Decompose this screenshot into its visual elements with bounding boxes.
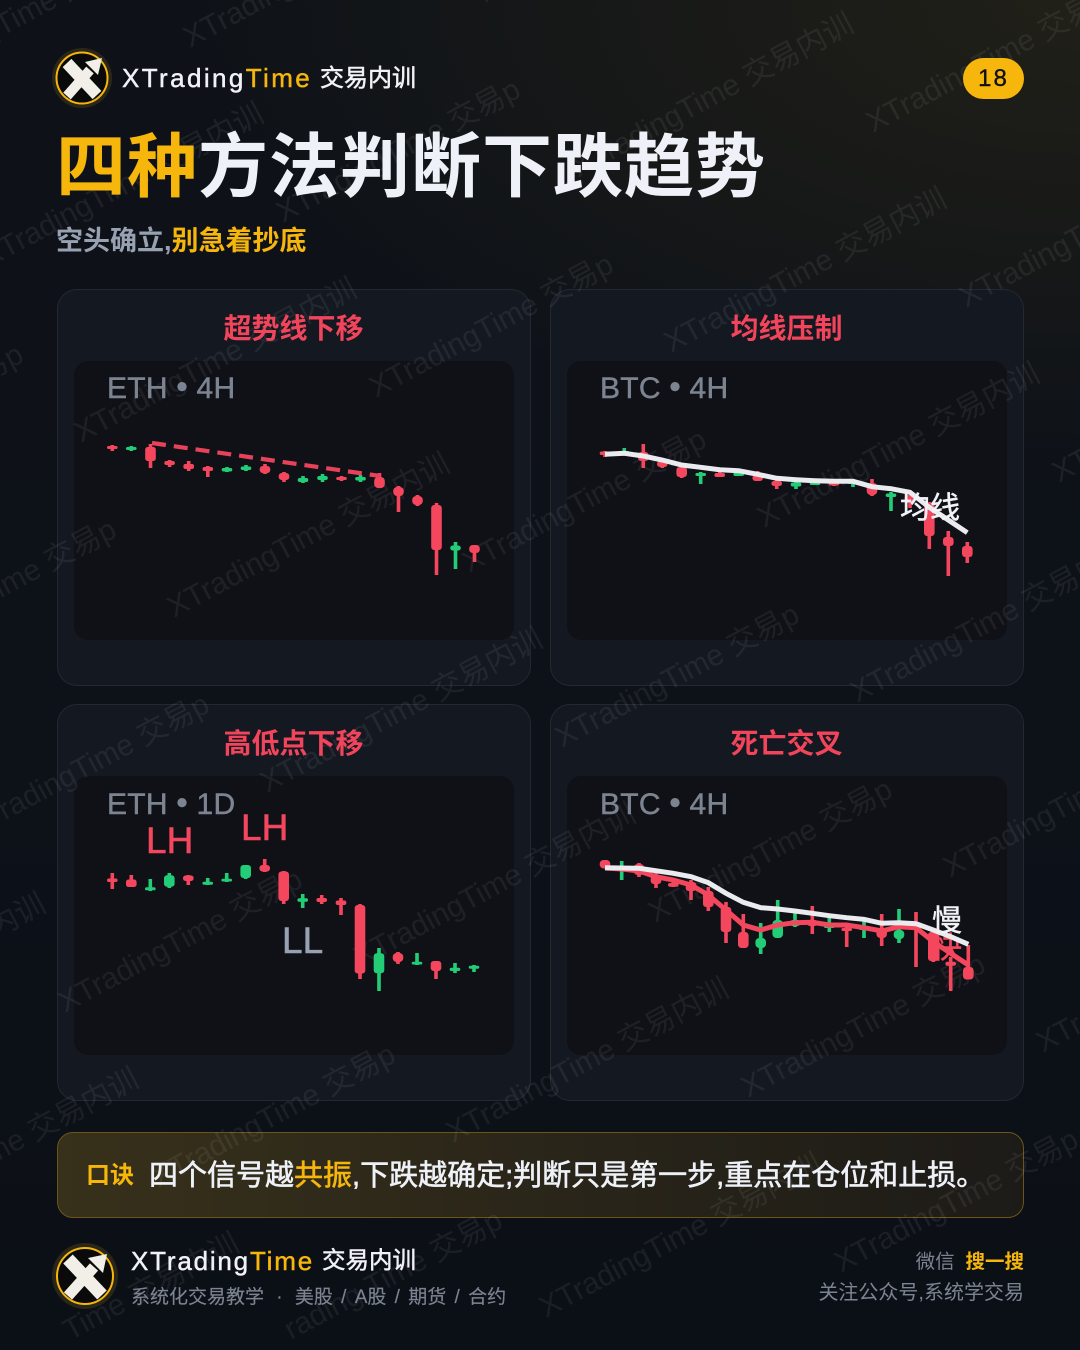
page number badge: [963, 58, 1024, 99]
callout background: [56, 1132, 1024, 1218]
watermark pattern: XTradingTime 交易内训: [162, 447, 455, 624]
card heading: trendline: 超势线下移: [223, 313, 364, 344]
panel: death cross card background: [550, 704, 1024, 1100]
candles red: [600, 860, 974, 991]
candles green: [619, 448, 896, 511]
moving average line: [605, 453, 967, 533]
chart label: ETH 1D: ETH · 1D: [107, 775, 235, 827]
candles red: [107, 859, 441, 979]
page number badge: 18: [978, 65, 1009, 92]
candlestick chart: lower highs and lows: [107, 807, 480, 991]
watermark pattern: XTradingTime 交易p: [550, 598, 805, 754]
panel: moving average card background: [550, 288, 1024, 686]
chart label: BTC 4H: BTC · 4H: [600, 359, 728, 411]
candlestick chart: trendline falling: [107, 440, 480, 575]
watermark pattern: rading Time 交易p: [279, 1204, 508, 1346]
watermark pattern: XTradingTime 交易p: [146, 1038, 401, 1194]
footer brand name: [131, 1246, 416, 1276]
label: LH second: LH: [241, 807, 288, 848]
watermark pattern: XTradingTime 交易内训: [566, 7, 859, 184]
watermark pattern: XTradingTime 交易p: [53, 863, 308, 1019]
subtitle: 空头确立,别急着抄底: [56, 226, 307, 256]
chart label: BTC 4H: BTC · 4H: [600, 775, 728, 827]
watermark pattern: XTradingTime 交易内训: [534, 1147, 827, 1324]
title: 四种方法判断下跌趋势: [56, 128, 766, 206]
candles red: [107, 444, 480, 575]
card heading: death cross: 死亡交叉: [730, 728, 842, 759]
header brand name: XTradingTime: [122, 63, 312, 93]
footer wechat line: 微信 搜一搜: [916, 1251, 1024, 1273]
watermark pattern: XTradingTime 交易内训: [69, 272, 362, 449]
line label: MA: 均线: [900, 492, 960, 525]
candles green: [145, 865, 479, 991]
fast line label: 快: [932, 932, 962, 965]
footer brand name: XTradingTime: [131, 1246, 314, 1276]
callout tag: 口诀: [86, 1162, 134, 1189]
header brand name: [122, 63, 416, 93]
fast moving average: [605, 868, 968, 965]
label: LL: LL: [282, 920, 323, 961]
card heading: moving average: 均线压制: [730, 313, 842, 344]
callout text: 四个信号越共振,下跌越确定;判断只是第一步,重点在仓位和止损。: [149, 1160, 985, 1192]
watermark pattern: Time 交易内训: [58, 1227, 244, 1347]
slow line label: 慢: [932, 905, 962, 938]
dashed trendline: [152, 443, 380, 476]
footer brand name: 交易内训: [322, 1247, 416, 1273]
watermark pattern: XTradingTime 交易内训: [441, 972, 734, 1149]
candlestick chart: moving average pressure: [600, 444, 973, 576]
watermark pattern: XTradingTime 交易p: [736, 948, 991, 1104]
watermark pattern: XTradingTime 交易内训: [255, 622, 548, 799]
watermark pattern: XTradingTime 交易p: [829, 1123, 1080, 1279]
watermark pattern: XTradingTime 交易p: [457, 423, 712, 579]
watermark pattern: XTradingTime 交易p: [364, 248, 619, 404]
icon: footer logo: [52, 1243, 118, 1309]
icon: header logo: [52, 48, 112, 108]
panel: lower highs card background: [56, 704, 530, 1100]
watermark pattern: XTradingTime 交易内训: [348, 797, 641, 974]
watermark pattern: XTradingTime 交易内训: [659, 182, 952, 359]
candles green: [616, 861, 904, 954]
label: LH first: LH: [146, 820, 193, 861]
panel: trendline card background: [56, 288, 530, 686]
slow moving average: [605, 868, 968, 944]
footer tagline: 系统化交易教学 · 美股 / A股 / 期货 / 合约: [131, 1287, 506, 1308]
footer follow line: 关注公众号,系统学交易: [818, 1282, 1024, 1304]
watermark pattern: XTradingTime 交易内训: [752, 357, 1045, 534]
card heading: lower highs: 高低点下移: [223, 728, 364, 759]
watermark pattern: XTradingTime 交易p: [271, 73, 526, 229]
chart label: ETH 4H: ETH · 4H: [107, 359, 235, 411]
candles green: [126, 446, 461, 569]
watermark pattern: XTradingTime 交易p: [643, 773, 898, 929]
candlestick chart: death cross: [600, 860, 974, 991]
header brand name: 交易内训: [320, 65, 416, 92]
candles red: [600, 444, 973, 576]
